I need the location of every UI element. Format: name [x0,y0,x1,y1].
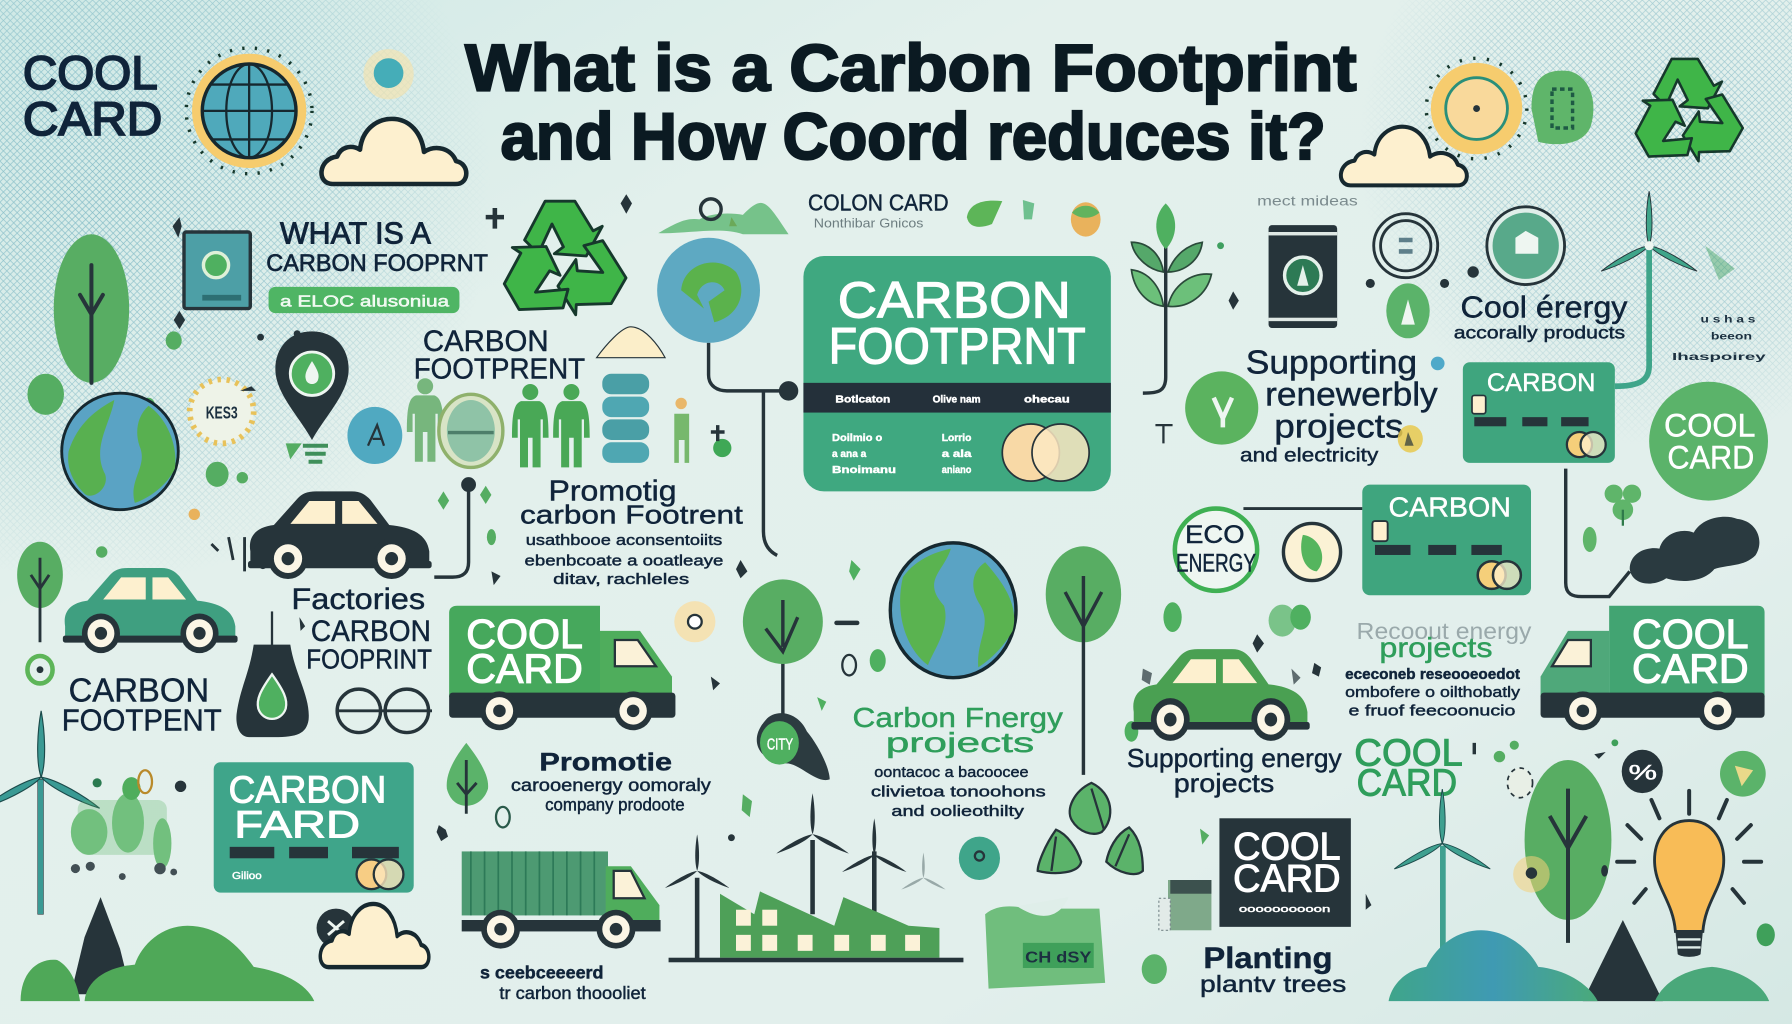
panel: main carbon footprint card: aniano [942,465,971,476]
card: carbon fard [214,762,414,893]
connector: eco to card [1243,507,1362,510]
logo: COOL CARD: COOL [23,47,158,99]
icon: light bulb [1617,791,1761,957]
icon: book [184,232,250,309]
icon: wind turbine bottom right [1393,789,1492,951]
sign: cool card black: CARD [1233,857,1341,900]
fine print top right [1672,314,1766,363]
text block: carbon energy projects: projects [886,727,1034,758]
title [465,31,1357,174]
text block: carbon footprint note: tr carbon thoooliet [499,983,646,1003]
heading: colon card: Nonthibar Gnicos [814,216,923,230]
decorative specks above card [93,770,186,800]
panel: main carbon footprint card: Doilmio o [832,433,882,444]
icon: green package: CH dSY [1025,949,1092,966]
icon: teal wheel badge [1487,207,1565,285]
icon: green package [985,897,1105,989]
text: renewable energy projects: ombofere o oilthobatly [1345,685,1521,701]
fine print top right: u s h a s [1701,314,1756,325]
icon: small tree left [17,542,63,642]
panel: main carbon footprint card: CARBON [838,271,1071,329]
icon: globe center [890,543,1016,678]
badge: cool card circle [1649,382,1768,501]
heading: supporting renewable projects: renewerbly [1265,377,1438,414]
text block: carbon energy projects: oontacoc a bacoocee [874,765,1029,781]
icon: round tree with magnifier: CITY [767,737,793,754]
icon: small leaf bottom [1142,954,1167,984]
text block: promotion: carooenergy oomoraly [511,775,711,795]
text: planting trees: plantv trees [1200,971,1346,997]
decorative green shapes top centre [658,199,789,234]
icon: truck cool card: COOL [466,611,583,657]
text: factories carbon footprint: Factories [291,583,425,616]
text block: promoting carbon footprint: usathbooe aconsentoiits [526,533,722,549]
text: renewable energy projects [1345,618,1532,719]
text: carbon footprint left: CARBON [69,673,209,710]
card: carbon small right: CARBON [1487,369,1595,397]
icon: small sun [363,49,414,99]
panel: main carbon footprint card: Bnoimanu [832,465,896,476]
heading: cool energy [1454,290,1628,342]
fine print top right: Ihaspoirey [1672,352,1766,363]
icon: cream mountain [597,327,665,358]
icon: green ring [27,656,53,683]
text: factories carbon footprint: CARBON [311,615,431,648]
text: renewable energy projects: ececoneb reseooeoedot [1345,667,1520,683]
text: factories carbon footprint: FOOPRINT [306,644,432,675]
heading: carbon footprint [414,325,585,385]
text block: carbon energy projects: Carbon Fnergy [853,702,1063,733]
text block: carbon footprint note [480,962,646,1003]
icon: truck cool card [449,606,675,730]
small text: project notes: mect mideas [1257,194,1358,209]
title: What is a Carbon Footprint [465,31,1357,105]
text: planting trees: Planting [1203,942,1333,975]
panel: main carbon footprint card: FOOTPRNT [829,316,1086,374]
panel: main carbon footprint card: Olive nam [933,394,981,405]
connector: car to text [434,479,474,577]
logo: COOL CARD [23,47,162,145]
text block: carbon energy projects: clivietoa tonoohons [871,785,1046,801]
icon: leaf circle [1283,523,1341,581]
text block: carbon energy projects: and oolieothilty [891,804,1025,820]
icon: recycle leaves [1038,783,1143,874]
badge: eco energy [1175,509,1257,591]
icon: green person [407,378,443,462]
icon: location pin [275,331,349,462]
card: carbon small right [1463,362,1615,463]
icon: green circle leaf [1185,371,1258,445]
icon: container truck [462,851,661,949]
badge: eco energy: ENERGY [1176,549,1256,577]
icon: truck right [1541,606,1765,730]
text: carbon footprint left: FOOTPENT [62,702,222,737]
heading: cool energy: Cool érergy [1461,290,1628,325]
text block: promoting carbon footprint: carbon Footrent [520,499,744,529]
text block: carbon energy projects [853,702,1063,820]
panel: what is a carbon footprint [184,215,488,313]
label: cool card green: CARD [1357,761,1457,803]
icon: plant [1131,203,1211,393]
icon: tree center right [1046,546,1121,775]
heading: supporting renewable projects: projects [1274,409,1403,446]
background mesh pattern left [0,0,470,562]
icon: round tree with magnifier [743,579,830,780]
icon: dark card reader [1269,225,1337,328]
icon: dark car [248,491,432,579]
icon: leaf tree [447,743,488,814]
badge: eco energy: ECO [1185,521,1245,549]
heading: carbon footprint: CARBON [423,325,549,358]
label: cool card green [1354,732,1463,803]
icon: small sun center [674,601,715,642]
icon: cloud bottom [320,904,429,967]
heading: supporting renewable projects: Supporting [1246,345,1417,382]
icon: truck right: COOL [1632,611,1749,657]
fine print top right: beeon [1711,331,1752,342]
decorative specks right [1217,242,1735,310]
icon: stacked pills [602,374,649,463]
badge: cool card circle: CARD [1667,440,1754,476]
icon: truck cool card: CARD [466,645,583,691]
text: factories carbon footprint [291,583,432,675]
icon: oil bottle with leaf [236,611,309,737]
panel: main carbon footprint card: a ana a [832,449,867,460]
pill label: a ELOC alusoniua [280,293,449,310]
card: carbon second [1362,485,1531,595]
decorative dash and shapes [711,560,886,711]
text: supporting energy projects: projects [1174,768,1274,798]
icon: kiosk [1159,829,1211,930]
icon: green circle figure [1386,283,1430,338]
icon: person orange [674,398,689,463]
text: planting trees [1200,942,1346,997]
text block: promoting carbon footprint: Promotig [549,476,677,508]
icon: blue circle globe [657,238,760,343]
icon: teal circle [347,407,402,464]
icon: ring badge [1374,214,1438,278]
text: renewable energy projects: e fruof feecoonucio [1349,703,1515,719]
logo: COOL CARD: CARD [23,93,162,145]
icon: mountains and blue hills [1389,920,1769,1001]
sign: cool card black [1219,818,1351,927]
text: renewable energy projects: projects [1379,632,1493,663]
pill label [269,287,459,313]
card: carbon fard: Gilioo [232,871,262,882]
card: carbon second: CARBON [1389,492,1511,523]
sign: cool card black: COOL [1233,825,1341,868]
panel: main carbon footprint card [803,256,1111,491]
heading: what is a: WHAT IS A [280,215,431,250]
connector and dark smoke cloud [1566,469,1759,597]
icon: clover [1583,485,1641,552]
panel: main carbon footprint card: ohecau [1024,394,1070,405]
heading: colon card: COLON CARD [808,189,949,215]
decorative specks near cars [96,529,501,631]
text: carbon footprint left [62,673,222,737]
icon: sun right [1426,58,1527,159]
icon: yellow ring [190,379,254,443]
connector line [709,343,797,555]
icon: green people pair [512,384,590,467]
text block: promotion [511,748,711,814]
icon: green car [63,568,238,653]
decorative specks mid bottom [437,794,752,841]
text block: carbon footprint note: s ceebceeeerd [480,962,603,982]
decorative specks bottom right [1366,739,1775,946]
heading: supporting renewable projects: and electricity [1240,445,1379,467]
icon: blurred green chart [71,793,177,880]
icon: globe with sun ring [186,48,312,174]
decorative blobs by heading [967,200,1101,237]
decorative specks centre right [1125,602,1321,742]
card: carbon fard: FARD [234,804,360,846]
subheading: carbon footprint: CARBON FOOPRNT [266,250,488,277]
icon: ring scene [439,394,503,467]
panel: main carbon footprint card: a ala [942,449,972,460]
background mesh pattern right [1378,0,1792,429]
icon: truck right: CARD [1632,645,1749,691]
text block: promotion: company prodoote [545,794,685,814]
badge: percent [1622,750,1663,793]
icon: tree bottom right [1525,760,1611,943]
icon: teal circle bottom [959,837,1000,880]
heading: cool energy: accorally products [1454,322,1625,342]
decorative leaves by cool card [1474,741,1533,798]
icon: yellow ring: KES3 [206,402,238,422]
badge: percent: % [1629,759,1657,784]
icon: globe left [62,393,178,510]
text: renewable energy projects: Recoout energy [1357,618,1532,644]
heading: supporting renewable projects [1240,345,1438,467]
icon: recycle large [491,201,636,327]
text: supporting energy projects: Supporting energy [1127,743,1343,773]
icon: cloud right [1341,127,1467,185]
icon: wind turbines and factory [664,793,963,962]
badge: green leaf circle [1720,751,1766,797]
title: and How Coord reduces it? [501,100,1326,174]
panel: main carbon footprint card: Botlcaton [835,394,890,405]
panel: main carbon footprint card: Lorrio [942,433,971,444]
text block: promoting carbon footprint [520,476,744,588]
icon: hills and dark tree [21,897,314,1001]
icon: cloud left [321,119,466,184]
sign: cool card black: oooooooooon [1239,904,1330,914]
decorative specks top left [173,194,737,337]
icon: wind turbine bottom left [0,711,101,914]
icon: green car right [1131,649,1310,741]
small icons near heading [1155,357,1445,453]
text block: promoting carbon footprint: ebenbcoate a ooatleaye [525,554,723,570]
text block: promoting carbon footprint: ditav, rachleles [553,572,689,588]
decorative specks mid left [27,331,731,520]
panel: carbon footprint people [190,325,689,467]
badge: cool card circle: COOL [1664,408,1755,444]
icon: glasses [336,689,432,733]
text block: promotion: Promotie [539,748,672,776]
card: carbon fard: CARBON [229,768,386,810]
heading: colon card [808,189,949,230]
icon: recycle top right [1624,59,1752,173]
text: supporting energy projects [1127,743,1343,798]
label: cool card green: COOL [1354,732,1463,774]
icon: tree left large [54,234,129,383]
icon: dark tool circle [317,909,355,947]
icon: wind turbine top right [1600,191,1698,386]
heading: carbon footprint: FOOTPRENT [414,353,585,385]
icon: green badge right [1531,71,1593,144]
